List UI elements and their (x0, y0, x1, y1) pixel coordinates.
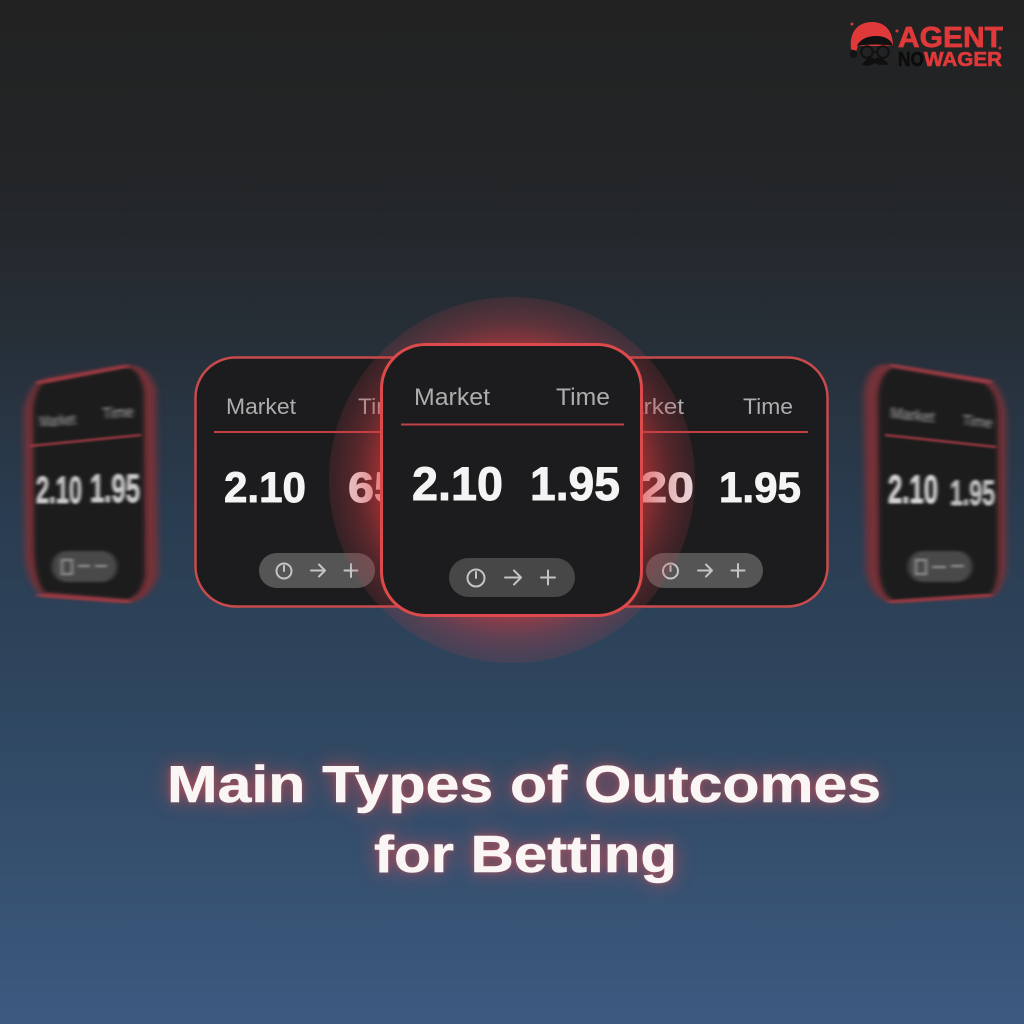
divider (401, 424, 624, 426)
label: Time: Time (743, 394, 793, 419)
icon: clock (276, 564, 292, 578)
logo: Agent No Wager (850, 22, 1003, 71)
card face (878, 368, 998, 600)
card side edge (864, 364, 1006, 603)
pill buttons (259, 553, 375, 588)
header labels: Time (102, 404, 134, 423)
label: Time: Time (556, 384, 610, 411)
card body (196, 358, 486, 606)
divider (30, 435, 141, 446)
panel: left card (196, 358, 486, 606)
odds values (36, 467, 140, 512)
icon: glasses (861, 46, 889, 58)
icon: plus (732, 564, 744, 577)
odds values: 2.10 (888, 468, 938, 512)
icon: plus (344, 564, 358, 577)
pill buttons (52, 551, 117, 582)
title wide glow: Main Types of Outcomes (167, 756, 881, 814)
divider (885, 435, 996, 447)
icon: arrow (505, 570, 521, 584)
odds values: 2.10 (36, 470, 82, 512)
logo sparkles (850, 22, 1002, 50)
header labels: Time (962, 412, 993, 432)
value: 2.10: 2.10 (224, 464, 306, 512)
value: 1.95: 1.95 (719, 464, 801, 512)
title line 2: for Betting (374, 826, 677, 884)
divider (214, 431, 470, 433)
title wide glow: for Betting (374, 826, 677, 884)
icon: arrow (311, 564, 325, 576)
card body (538, 358, 828, 606)
bottom edge highlight (36, 595, 130, 602)
icon: moustache (862, 58, 889, 66)
header labels (890, 405, 993, 432)
odds values: 1.95 (90, 467, 140, 511)
title line 1: Main Types of Outcomes (167, 756, 881, 814)
bottom edge highlight (888, 595, 992, 602)
pill icons (916, 560, 964, 574)
panel: center card (382, 344, 642, 616)
label: Time: Time (358, 394, 408, 419)
pill buttons (908, 551, 972, 582)
title tight glow (167, 756, 881, 884)
icon: clock (468, 570, 484, 586)
value: 2.20: 2.20 (600, 464, 694, 512)
icon: hat brim (857, 36, 893, 46)
logo word: NO: NO (898, 49, 924, 71)
icon: santa hat (851, 22, 893, 52)
pill buttons (646, 553, 763, 588)
panel: far left blurred card (24, 365, 158, 603)
panel: right card (538, 358, 828, 606)
top edge highlight (890, 365, 992, 382)
header labels: Market (39, 411, 77, 431)
title tight glow: Main Types of Outcomes (167, 756, 881, 814)
logo word: WAGER: WAGER (924, 49, 1003, 71)
odds values: 1.95 (950, 474, 995, 513)
panel: far right blurred card (864, 364, 1006, 603)
divider (560, 431, 808, 433)
label: Market: Market (226, 394, 296, 419)
icon: clock (663, 564, 678, 578)
pill buttons (449, 558, 575, 597)
title wide glow (167, 756, 881, 884)
pill icons (62, 560, 107, 574)
card face (33, 368, 145, 599)
icon: arrow (698, 564, 712, 576)
header labels: Market (890, 405, 936, 427)
label: Market: Market (610, 394, 684, 419)
logo word: AGENT: AGENT (898, 22, 1003, 54)
value: 65: 65 (348, 464, 400, 512)
header labels (39, 404, 134, 431)
icon: plus (541, 570, 555, 584)
label: Market: Market (414, 384, 490, 411)
red glow circle (329, 297, 695, 663)
title (167, 756, 881, 884)
card body (382, 344, 642, 616)
title tight glow: for Betting (374, 826, 677, 884)
icon: pompom (850, 50, 858, 58)
top edge highlight (36, 366, 128, 383)
value: 1.95: 1.95 (530, 457, 620, 510)
value: 2.10: 2.10 (412, 457, 503, 510)
card side edge (24, 365, 158, 603)
